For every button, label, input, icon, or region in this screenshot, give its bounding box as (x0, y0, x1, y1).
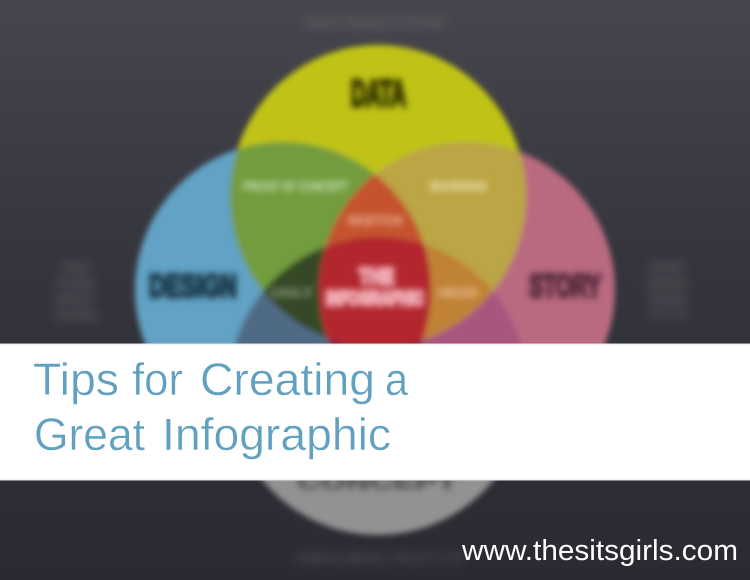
overlap: data and story (374, 138, 528, 291)
label: right caption: FRESH (649, 291, 687, 307)
label: left caption (54, 259, 98, 323)
title: Great (34, 409, 145, 460)
label: dark green region: UGLY (270, 285, 313, 300)
circle: data (230, 45, 526, 347)
overlap: all four (316, 233, 434, 344)
title: Infographic (162, 409, 391, 460)
title: for (132, 354, 183, 405)
overlap: design data concept (262, 245, 330, 340)
overlap: data story concept (420, 244, 494, 341)
label: left caption: FUNCTION (54, 307, 98, 323)
label: centre title: THE (359, 264, 394, 289)
white title band (0, 344, 750, 480)
label: left caption: TRUE (60, 259, 90, 275)
label: right caption: NEW (649, 305, 688, 321)
label: data: DATA (351, 73, 406, 114)
overlap: story and concept (418, 294, 521, 344)
label: left caption: FORM (56, 275, 94, 291)
label: concept caption: CONCEPT (297, 472, 457, 494)
circle: story (319, 142, 615, 438)
label: design: DESIGN (149, 268, 237, 304)
label: right caption: STORY (648, 259, 687, 275)
circle: concept (229, 237, 527, 535)
title: Tips (33, 354, 119, 405)
title: Creating (200, 354, 375, 405)
label: right caption: MEANING (647, 275, 689, 291)
overlap: design and data (226, 139, 376, 294)
label: left caption: BEAUTY (56, 291, 97, 307)
label: top caption: WHAT MAKES A GOOD (305, 14, 445, 31)
label: centre top: SKETCH (347, 212, 403, 228)
label: centre title: INFOGRAPHIC (326, 288, 424, 310)
label: centre title (326, 264, 424, 310)
blurred venn diagram (135, 45, 615, 535)
label: data and story overlap: BORING (430, 178, 487, 194)
overlap: design and concept (232, 289, 334, 344)
label: orange region: USELESS (438, 285, 478, 300)
label: bottom caption: USEFULNESS, UTILITY, FIT (295, 550, 465, 567)
title: a (385, 354, 409, 405)
overlap: design and story and concept (326, 335, 423, 344)
label: right caption (647, 259, 689, 321)
overlap: design data story (324, 172, 425, 250)
label: data and design overlap: PROOF OF CONCEPT (243, 178, 348, 194)
website url: www.thesitsgirls.com (461, 535, 738, 567)
title (33, 354, 409, 460)
blurred labels (149, 73, 601, 494)
circle: design (135, 142, 431, 438)
label: story: STORY (529, 268, 601, 304)
